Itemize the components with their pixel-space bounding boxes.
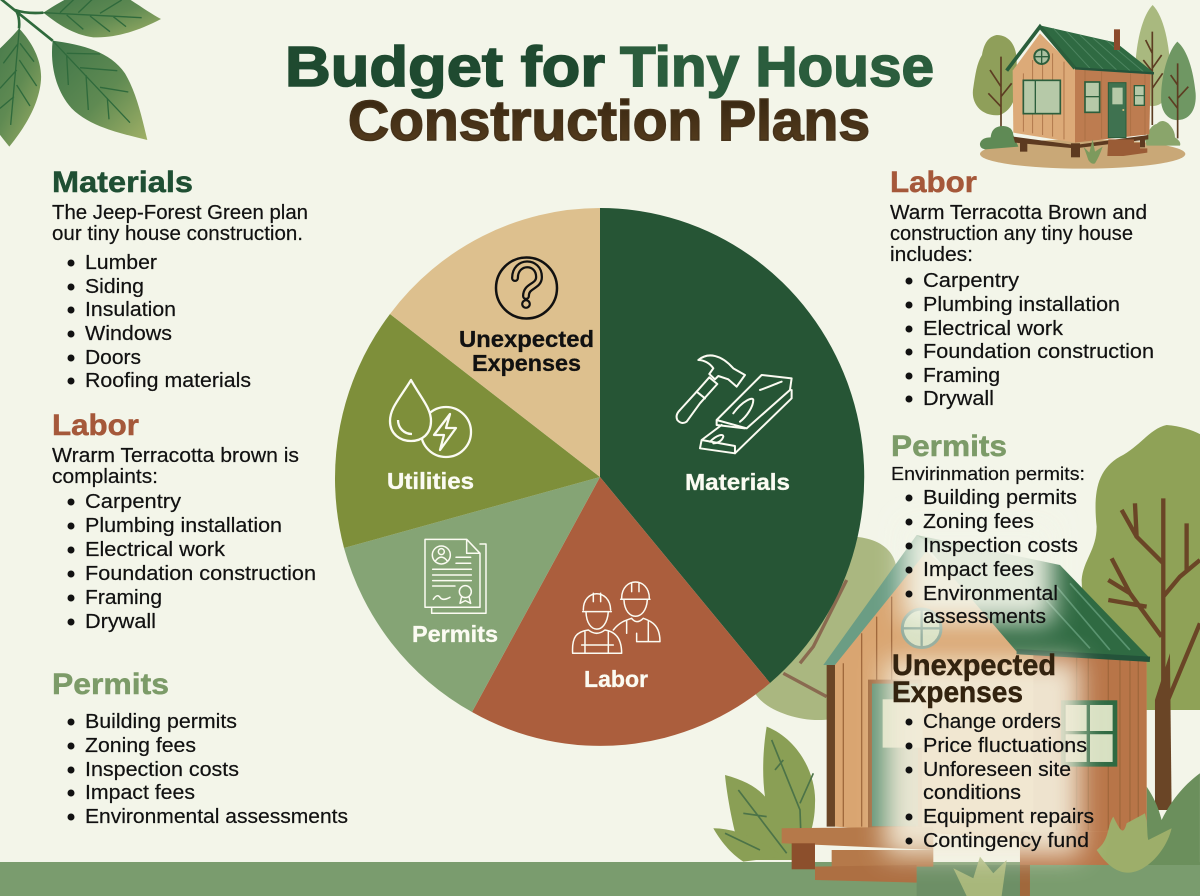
slice: utilities	[335, 314, 600, 548]
label: permits: Permits	[412, 621, 498, 647]
bullet list	[68, 491, 316, 633]
bullet list: Foundation construction	[85, 563, 316, 585]
description: Wrarm Terracotta brown is	[52, 445, 299, 467]
bullet list: conditions	[923, 782, 1021, 804]
description: Envirinmation permits:	[891, 464, 1085, 484]
slice: permits	[344, 477, 600, 712]
bullet list: Unforeseen site	[923, 759, 1071, 781]
left panel: labor	[52, 409, 316, 633]
bullet list: Foundation construction	[923, 341, 1154, 363]
heading: permits: Permits	[52, 668, 169, 701]
icon: question mark	[496, 258, 557, 318]
label: utilities: Utilities	[387, 468, 474, 494]
bullet list: Framing	[85, 587, 162, 609]
bullet list: Building permits	[85, 711, 237, 733]
title: Construction Plans	[348, 89, 870, 153]
bullet list: Environmental	[923, 583, 1058, 605]
bullet list: Contingency fund	[923, 830, 1089, 852]
label: unexpected expenses: Unexpected	[459, 326, 594, 352]
heading: materials: Materials	[52, 166, 193, 199]
description: includes:	[890, 244, 973, 266]
bullet list	[906, 270, 1154, 410]
description: complaints:	[52, 466, 158, 488]
bullet list	[906, 487, 1078, 628]
bullet list: Electrical work	[923, 318, 1064, 340]
bullet list	[906, 711, 1094, 852]
illustration: large tiny house with trees	[713, 425, 1200, 896]
wash behind house text	[885, 522, 1080, 855]
label: labor: Labor	[584, 666, 648, 692]
bullet list: Impact fees	[85, 782, 195, 804]
bullet list: Plumbing installation	[85, 515, 282, 537]
bullet list: Change orders	[923, 711, 1061, 733]
title: Tiny House	[620, 35, 934, 99]
pie chart	[335, 208, 864, 746]
label: unexpected expenses: Expenses	[472, 350, 581, 376]
left panel: permits	[52, 668, 348, 828]
bullet list: Drywall	[923, 388, 994, 410]
illustration: leaves	[0, 0, 161, 147]
bullet list: Carpentry	[85, 491, 181, 513]
description: The Jeep-Forest Green plan	[52, 202, 308, 224]
bullet list: Insulation	[85, 299, 176, 321]
slice: labor	[472, 477, 770, 746]
bullet list: Windows	[85, 323, 172, 345]
bullet list: Drywall	[85, 611, 156, 633]
bullet list: Roofing materials	[85, 370, 251, 392]
bullet list	[68, 711, 348, 828]
bullet list: Lumber	[85, 252, 157, 274]
heading: unexpected expenses: Unexpected	[892, 649, 1056, 682]
bullet list: Framing	[923, 365, 1000, 387]
icon: workers	[573, 582, 660, 653]
left panel: materials	[52, 166, 308, 392]
bullet list: Carpentry	[923, 270, 1019, 292]
bullet list	[68, 252, 251, 392]
title	[285, 35, 934, 153]
heading: labor: Labor	[890, 166, 977, 199]
description: construction any tiny house	[890, 223, 1133, 245]
bullet list: Zoning fees	[923, 511, 1034, 533]
bullet list: Price fluctuations	[923, 735, 1087, 757]
right panel: permits	[891, 430, 1085, 628]
bullet list: Siding	[85, 276, 144, 298]
heading: permits: Permits	[891, 430, 1007, 463]
bullet list: Building permits	[923, 487, 1077, 509]
slice: materials	[600, 208, 864, 683]
illustration: small tiny house	[973, 5, 1196, 169]
label: materials: Materials	[685, 469, 790, 495]
bullet list: Zoning fees	[85, 735, 196, 757]
icon: drop and bolt	[390, 380, 471, 457]
heading: labor: Labor	[52, 409, 139, 442]
bullet list: Inspection costs	[85, 759, 239, 781]
right panel: unexpected expenses	[892, 649, 1094, 852]
slice: unexpected expenses	[390, 208, 600, 477]
description: our tiny house construction.	[52, 223, 303, 245]
bullet list: Plumbing installation	[923, 294, 1120, 316]
icon: permit document	[425, 539, 486, 613]
heading: unexpected expenses: Expenses	[892, 676, 1023, 709]
bullet list: Equipment repairs	[923, 806, 1094, 828]
ground band	[0, 862, 1200, 896]
bullet list: Inspection costs	[923, 535, 1078, 557]
title: Budget for	[285, 35, 605, 99]
right panel: labor	[890, 166, 1154, 410]
description: Warm Terracotta Brown and	[890, 202, 1147, 224]
icon: hammer and planks	[677, 355, 792, 453]
bullet list: assessments	[923, 606, 1046, 628]
bullet list: Electrical work	[85, 539, 226, 561]
bullet list: Environmental assessments	[85, 806, 348, 828]
bullet list: Impact fees	[923, 559, 1034, 581]
bullet list: Doors	[85, 347, 141, 369]
